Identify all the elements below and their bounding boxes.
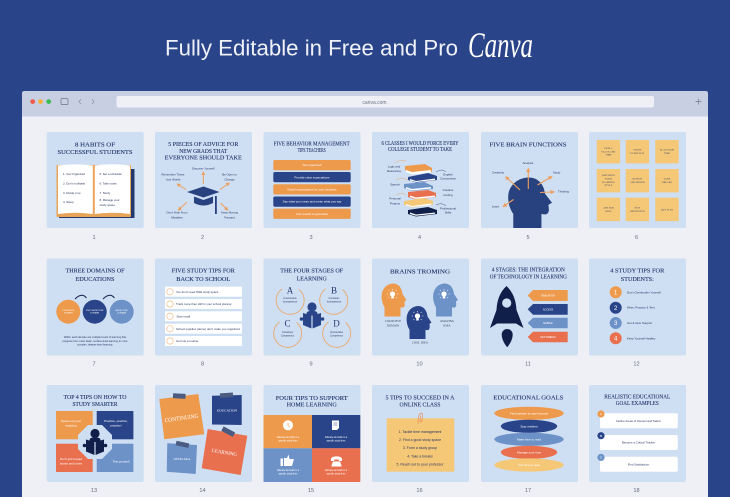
tile grid: specific study time xyxy=(279,472,298,476)
card 17: educational goals xyxy=(481,385,578,494)
advice labels: Change xyxy=(224,178,235,182)
stage tags: SIMILATION xyxy=(541,294,555,298)
tip tiles: Space out your xyxy=(61,419,81,423)
card 18: realistic goal examples: REALISTIC EDUCATIONAL xyxy=(604,393,670,400)
card 1: 8 habits of successful students: 1 xyxy=(92,235,96,241)
card 12: study tips for students: STUDENTS: xyxy=(621,276,654,283)
card 15: home learning: HOME LEARNING xyxy=(287,402,337,408)
tips rows: You don't need ONE study space xyxy=(176,290,219,294)
card 15: home learning: 15 xyxy=(308,488,314,494)
advice labels: Be Open to xyxy=(222,172,237,176)
card 5: five brain functions xyxy=(481,132,578,241)
stage labels: Conscious xyxy=(329,298,340,300)
tip tiles: Don't just reread xyxy=(60,457,82,461)
icon: open book: 6. Take notes xyxy=(100,182,117,186)
numbered tips: 1 xyxy=(614,290,618,296)
icon: head silhouette xyxy=(508,178,552,228)
card 11: technology stages xyxy=(481,258,578,368)
note: learning: LEARNING xyxy=(211,449,238,458)
card 5: five brain functions: 5 xyxy=(526,235,530,241)
icon: rocket xyxy=(490,286,524,347)
function labels: Creativity xyxy=(492,170,505,174)
stage labels: Incompetence xyxy=(283,300,298,304)
notes grid: PLACE AND xyxy=(601,150,616,153)
card 14: taped notes: 14 xyxy=(199,488,206,494)
tips rows xyxy=(165,287,242,346)
domain circles: PSYCHOMOTOR xyxy=(86,310,104,312)
icon: open book: 5. Set a schedule xyxy=(100,172,122,176)
card 12: study tips for students xyxy=(589,258,686,368)
stage labels: B xyxy=(331,286,337,296)
note: ostelaka: OSTELAKA xyxy=(174,457,191,461)
note: education: EDUCATION xyxy=(217,408,237,412)
title: Canva xyxy=(468,25,533,65)
notes grid: DISCOVER xyxy=(602,174,615,177)
icon: open book: 4. Sleep xyxy=(63,200,74,204)
book labels: Reasoning xyxy=(387,169,401,173)
notes grid: TIME xyxy=(605,154,612,157)
card 9: four stages of learning xyxy=(264,258,360,368)
notes grid: REVIEW xyxy=(633,178,643,180)
tile grid: specific study time xyxy=(327,472,346,476)
goal ellipses: Find passion to stay focused xyxy=(510,411,548,415)
yellow note: 2. Find a good study space xyxy=(399,438,441,442)
card 1: 8 habits of successful students: 8 HABITS OF xyxy=(75,142,115,149)
card 11: technology stages: OF TECHNOLOGY IN LEARNING xyxy=(490,274,567,280)
card 8: study tips for back to school: 8 xyxy=(201,362,204,368)
advice labels: Discover Yourself xyxy=(192,166,215,170)
notes grid: LIFT IT UP xyxy=(661,208,674,212)
card 15: home learning xyxy=(264,385,360,494)
book labels: Creative xyxy=(443,188,454,192)
book labels: Composition xyxy=(440,176,456,180)
function labels xyxy=(492,161,569,208)
numbered tips: Keep Yourself Healthy xyxy=(627,336,656,340)
tip tiles: studying xyxy=(65,424,77,428)
book labels: Coding xyxy=(443,193,453,197)
stage labels: Unconscious xyxy=(283,298,297,300)
tips rows: Track more than HW in your school planner xyxy=(176,302,232,306)
notes grid: STYLE xyxy=(605,184,613,187)
description xyxy=(62,335,128,347)
browser window xyxy=(22,91,708,497)
icon: open book: 1. Get Organized xyxy=(63,172,85,176)
tips rows: Get into a routine xyxy=(176,339,199,343)
icon: graduation cap xyxy=(187,186,220,214)
arrows from brain xyxy=(504,170,553,206)
notes grid: AND RENEW xyxy=(630,181,645,184)
goal ellipses xyxy=(494,407,564,472)
goal ellipses: Stay resilient xyxy=(520,424,538,428)
tile grid: Allocate and stick to a xyxy=(325,469,348,472)
numbered tips: Don't Overburden Yourself xyxy=(627,290,661,294)
notes grid xyxy=(597,140,679,221)
stage labels: C xyxy=(284,318,291,328)
card 2: advice for new grads: 2 xyxy=(201,235,204,241)
card 4: 6 classes: 6 CLASSES I WOULD FORCE EVERY xyxy=(382,140,459,147)
tile grid: specific study time xyxy=(327,440,346,442)
card 3: behavior management: 3 xyxy=(309,235,313,241)
stage labels: A xyxy=(287,286,294,296)
card 16: online class tips: 5 TIPS TO SUCCEED IN A xyxy=(386,394,455,401)
icon: open book: 7. Study xyxy=(100,191,111,195)
card 2: advice for new grads: EVERYONE SHOULD TAKE xyxy=(165,155,242,162)
card 11: technology stages: 4 STAGES: THE INTEGRATION xyxy=(492,267,565,274)
book labels: Logic and xyxy=(388,164,401,168)
yellow note: 5. Reach out to your professor xyxy=(396,462,444,466)
goal rows: Define Areas of Interest and Talent xyxy=(616,419,661,423)
tile grid: Allocate and stick to a xyxy=(325,436,348,439)
notes grid: STUDY xyxy=(633,148,642,152)
yellow note: 4. Take a breaks xyxy=(407,454,433,458)
card 15: home learning: FOUR TIPS TO SUPPORT xyxy=(276,395,348,402)
stage tags: ACCESS xyxy=(543,308,553,311)
card 6: sticky notes xyxy=(589,132,686,241)
book labels: Skills xyxy=(445,210,452,214)
card 10: brainstorming: 10 xyxy=(416,362,423,368)
advice labels: Don't Hide From xyxy=(167,210,188,214)
notes grid: BREAKS xyxy=(662,181,673,184)
card 14: taped notes xyxy=(155,385,252,494)
domain circles: AFFECTIVE xyxy=(116,309,128,312)
stage labels: Competence xyxy=(281,334,295,338)
yellow note: 3. Form a study group xyxy=(403,446,437,450)
goal rows: Become a Critical Thinker xyxy=(622,441,655,445)
book labels: Finance xyxy=(390,202,401,206)
card 17: educational goals: 17 xyxy=(525,488,531,494)
card 12: study tips for students: 12 xyxy=(633,362,640,368)
card 17: educational goals: EDUCATIONAL GOALS xyxy=(493,394,564,401)
book labels: Personal xyxy=(389,196,401,200)
advice labels: Keep Moving xyxy=(221,210,238,214)
card 9: four stages of learning: LEARNING xyxy=(297,276,327,283)
arrows to advice labels xyxy=(178,173,228,210)
note: continuing: CONTINUING xyxy=(164,414,199,424)
stage labels: Competence xyxy=(330,334,344,338)
notes grid: PLAN YOUR xyxy=(660,148,674,152)
idea labels: AMAZING xyxy=(440,319,455,323)
yellow note: 1. Tackle time management xyxy=(399,430,441,434)
card 3: behavior management: TIPS TEACHERS xyxy=(298,147,326,154)
function labels: Analysis xyxy=(523,161,534,165)
tile grid: Allocate and stick to a xyxy=(277,436,300,439)
advice labels xyxy=(161,166,238,219)
tips list: Say what you mean and mean what you say xyxy=(283,200,342,204)
card 16: online class tips: 16 xyxy=(416,488,423,494)
goal ellipses: Manage your time xyxy=(517,450,541,454)
card 4: 6 classes xyxy=(372,132,469,241)
function labels: Thinking xyxy=(558,190,569,194)
icon: paperclip xyxy=(418,413,422,424)
function labels: Study xyxy=(553,170,561,174)
card 9: four stages of learning: 9 xyxy=(309,362,313,368)
notes grid: TIME xyxy=(664,152,671,155)
goal ellipses: Make time to read xyxy=(517,437,541,441)
yellow note xyxy=(387,418,454,472)
browser window: canva.com xyxy=(362,100,387,106)
card 7: three domains xyxy=(47,258,144,368)
card 13: how to study smarter: 13 xyxy=(91,488,97,494)
notes grid: STAY xyxy=(634,206,641,210)
tile grid: Allocate and stick to a xyxy=(277,469,300,472)
book labels: English xyxy=(443,172,453,176)
stage labels: D xyxy=(333,318,340,328)
card 12: study tips for students: 4 STUDY TIPS FOR xyxy=(610,268,665,275)
card 13: how to study smarter: TOP 4 TIPS ON HOW TO xyxy=(64,394,127,401)
card 1: 8 habits of successful students: SUCCESSFUL STUDENTS xyxy=(58,149,133,156)
goal ellipses: Get time to read xyxy=(518,463,540,467)
card 3: behavior management: FIVE BEHAVIOR MANAGEMENT xyxy=(274,141,350,148)
card 16: online class tips: ONLINE CLASS xyxy=(400,401,441,408)
icon: three heads with bulbs xyxy=(382,284,458,339)
stage tags xyxy=(528,290,568,342)
stage labels: Unconscious xyxy=(330,332,344,334)
card 11: technology stages: 11 xyxy=(525,362,531,368)
card 13: how to study smarter xyxy=(47,385,144,494)
tips rows: Start small xyxy=(176,314,191,318)
card 3: behavior management xyxy=(264,132,360,241)
icon: open book: 2. Don't multitask xyxy=(63,182,86,186)
icon: reader xyxy=(300,302,324,328)
book labels xyxy=(387,160,456,214)
card 10: brainstorming xyxy=(372,258,469,368)
card 7: three domains: EDUCATIONS xyxy=(76,276,115,283)
function labels: Learn xyxy=(492,204,500,208)
card 6: sticky notes: 6 xyxy=(635,235,638,241)
card 4: 6 classes: 4 xyxy=(418,235,421,241)
tips list: Use results or gimmicks xyxy=(296,212,328,216)
goal rows: Find Satisfaction xyxy=(628,462,650,466)
card 10: brainstorming: BRAINS TROMING xyxy=(390,268,450,275)
numbered tips: 3 xyxy=(614,321,618,327)
advice labels: Remember These xyxy=(161,172,185,176)
icon: open book: 8. Manage your xyxy=(100,198,120,202)
tip tiles: Practice, practice, xyxy=(104,419,128,423)
card 8: study tips for back to school: BACK TO SCHOOL xyxy=(176,276,230,283)
advice labels: Mistakes xyxy=(171,215,183,219)
advice labels: Forward xyxy=(224,215,235,219)
curved arrows xyxy=(75,295,114,299)
card 8: study tips for back to school xyxy=(155,258,252,368)
tip tiles: practice! xyxy=(110,424,122,428)
card 4: 6 classes: COLLEGE STUDENT TO TAKE xyxy=(388,146,452,153)
tips list: Get organized xyxy=(303,163,322,167)
card 18: realistic goal examples: 18 xyxy=(633,488,640,494)
idea labels: COOL IDEA xyxy=(412,340,429,344)
notes grid: EVERY DAY xyxy=(630,152,645,155)
notes grid: ASK FOR xyxy=(603,206,614,210)
icon: open book xyxy=(56,164,134,218)
numbered tips: 4 xyxy=(614,336,618,342)
goal rows: A xyxy=(600,412,602,416)
card 8: study tips for back to school: FIVE STUDY TIPS FOR xyxy=(172,268,235,275)
numbered tips xyxy=(610,286,661,344)
stage tags: MULTIMEDIA xyxy=(540,336,556,339)
icon: open book: 3. Divide it up xyxy=(63,191,81,195)
domain circles: COGNITIVE xyxy=(62,310,75,312)
goal rows: C xyxy=(600,456,603,460)
idea labels xyxy=(385,319,455,344)
title: Fully Editable in Free and Pro xyxy=(165,36,458,60)
book labels: Professional xyxy=(440,206,456,210)
notes grid: YOUR xyxy=(605,177,612,180)
card 13: how to study smarter: STUDY SMARTER xyxy=(72,401,118,408)
tile grid xyxy=(264,415,360,482)
card 18: realistic goal examples xyxy=(589,385,686,494)
notes grid: PICK A xyxy=(604,147,613,150)
card 18: realistic goal examples: GOAL EXAMPLES xyxy=(616,400,659,407)
stage labels: Conscious xyxy=(282,332,294,334)
numbered tips: 2 xyxy=(614,306,618,312)
center octagon with reader icon xyxy=(78,425,112,459)
tip tiles: Test yourself xyxy=(113,460,130,464)
title xyxy=(165,25,533,65)
numbered tips: Get & Give Support xyxy=(627,321,652,325)
idea labels: IDEA xyxy=(443,324,451,328)
notes grid: TAKE xyxy=(664,178,671,180)
domain circles: DOMAIN xyxy=(117,312,126,315)
notes grid: LEARNING xyxy=(602,181,615,184)
description: progress from more basic, surface-level learning to more xyxy=(62,339,128,343)
idea labels: DOMAIN xyxy=(387,324,400,328)
tips list xyxy=(273,160,351,219)
card 5: five brain functions: FIVE BRAIN FUNCTIONS xyxy=(490,142,567,149)
card 7: three domains: 7 xyxy=(92,362,96,368)
tip tiles: books and notes xyxy=(60,462,83,466)
card 2: advice for new grads: 5 PIECES OF ADVICE FOR xyxy=(168,141,239,148)
description: Within each domain are multiple levels of learning that xyxy=(64,335,126,339)
card 2: advice for new grads: NEW GRADS THAT xyxy=(179,148,227,155)
stage tags: MOBILE xyxy=(543,322,553,325)
card 9: four stages of learning: THE FOUR STAGES OF xyxy=(280,267,344,274)
domain circles: DOMAIN xyxy=(64,312,73,315)
description: complex, deeper-level learning. xyxy=(77,343,113,347)
card 2: advice for new grads xyxy=(155,132,252,241)
advice labels: Your Words xyxy=(166,178,181,182)
tips list: Provide clear expectations xyxy=(294,175,330,179)
notes grid: HELP xyxy=(605,210,612,213)
stage rings xyxy=(274,289,351,347)
notes grid: MOTIVATED xyxy=(630,210,645,213)
stage labels: Incompetence xyxy=(327,300,342,304)
icon: open book: study space xyxy=(100,203,115,207)
card 7: three domains: THREE DOMAINS OF xyxy=(66,268,125,275)
tips rows: School supplies (alone) don't make you organized xyxy=(176,327,240,331)
card 16: online class tips xyxy=(372,385,469,494)
icon: stack of books xyxy=(404,164,437,216)
domain circles: DOMAIN xyxy=(90,312,99,315)
card 1: 8 habits of successful students xyxy=(47,132,144,241)
tip tiles xyxy=(56,411,133,472)
domain circles xyxy=(56,300,134,324)
tips list: Model expectations for your students xyxy=(287,188,337,192)
numbered tips: Write, Practice & Test xyxy=(627,306,655,310)
goal rows xyxy=(597,410,678,472)
stage labels xyxy=(281,286,344,338)
book labels: Speech xyxy=(390,182,400,186)
tile grid: specific study time xyxy=(279,440,298,442)
goal rows: B xyxy=(600,434,602,438)
idea labels: COGNITIVE xyxy=(385,319,401,323)
